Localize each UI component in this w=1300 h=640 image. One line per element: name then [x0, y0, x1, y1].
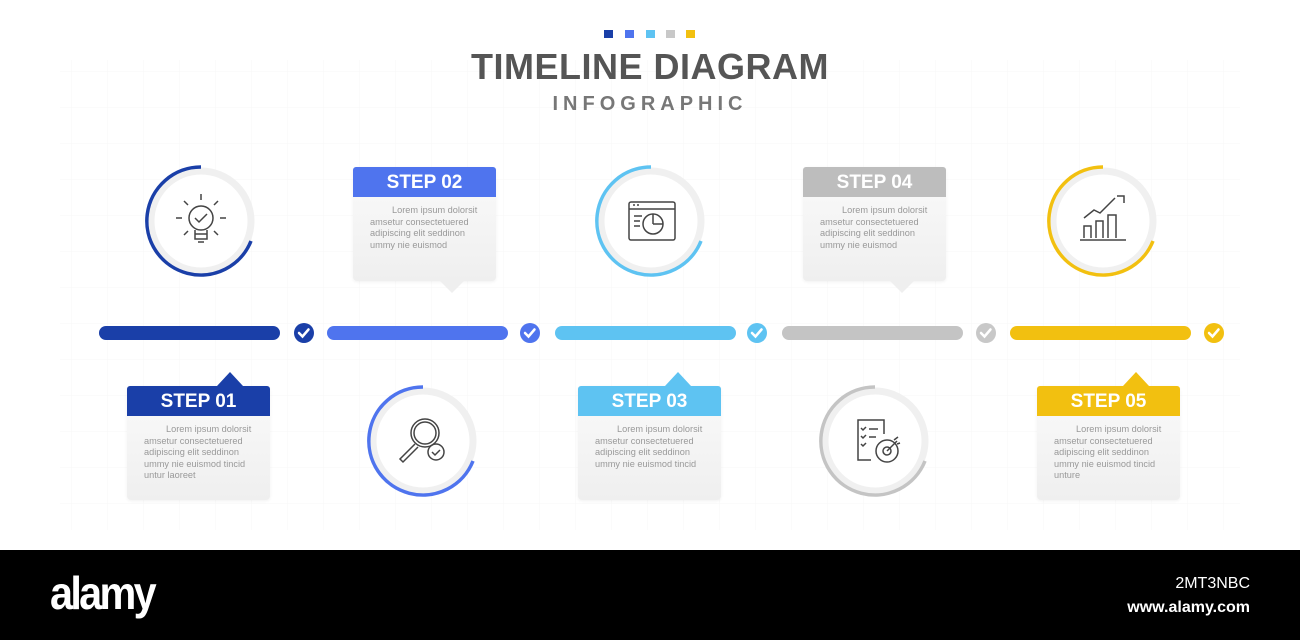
heading — [127, 386, 270, 416]
icon circle 2: magnifier — [369, 387, 473, 495]
text: Lorem ipsum dolorsit — [617, 424, 702, 434]
icon circle 1: lightbulb — [147, 167, 251, 275]
heading — [1037, 386, 1180, 416]
heading — [353, 167, 496, 197]
heading: STEP 04 — [837, 172, 912, 193]
text — [820, 205, 928, 250]
icon circle 5: growth chart — [1049, 167, 1153, 275]
text: amsetur consectetuered adipiscing elit seddinon ummy nie euismod tincid — [595, 436, 696, 469]
text: amsetur consectetuered adipiscing elit seddinon ummy nie euismod — [820, 217, 919, 250]
pointer — [1123, 372, 1149, 386]
text: Lorem ipsum dolorsit — [166, 424, 251, 434]
text: amsetur consectetuered adipiscing elit seddinon ummy nie euismod tincid untur laoreet — [144, 436, 245, 480]
step 05 — [1037, 386, 1180, 500]
heading: STEP 03 — [612, 391, 687, 412]
icon circle 3: browser chart — [597, 167, 701, 275]
heading — [578, 386, 721, 416]
timeline bars — [99, 326, 1191, 340]
pointer — [440, 281, 464, 293]
logo: alamy — [50, 567, 154, 619]
text: Lorem ipsum dolorsit — [1076, 424, 1161, 434]
image id: 2MT3NBC — [1175, 575, 1250, 592]
image id: www.alamy.com — [1127, 599, 1250, 616]
text: amsetur consectetuered adipiscing elit seddinon ummy nie euismod tincid unture — [1054, 436, 1155, 480]
image id — [1127, 575, 1250, 616]
pointer — [665, 372, 691, 386]
heading: STEP 02 — [387, 172, 462, 193]
text — [370, 205, 478, 250]
check markers — [294, 323, 1224, 343]
step 04 — [803, 167, 946, 281]
footer bar — [0, 550, 1300, 640]
pointer — [217, 372, 243, 386]
title: TIMELINE DIAGRAM — [471, 46, 829, 87]
icon circle 4: checklist target — [821, 387, 925, 495]
pointer — [890, 281, 914, 293]
step 03 — [578, 386, 721, 500]
subtitle: INFOGRAPHIC — [552, 93, 748, 115]
step 02 — [353, 167, 496, 281]
text: Lorem ipsum dolorsit — [392, 205, 477, 215]
text: amsetur consectetuered adipiscing elit seddinon ummy nie euismod — [370, 217, 469, 250]
heading — [803, 167, 946, 197]
step 01 — [127, 386, 270, 500]
heading: STEP 05 — [1071, 391, 1146, 412]
heading: STEP 01 — [161, 391, 236, 412]
text: Lorem ipsum dolorsit — [842, 205, 927, 215]
text — [595, 424, 702, 469]
title dots — [604, 30, 695, 38]
